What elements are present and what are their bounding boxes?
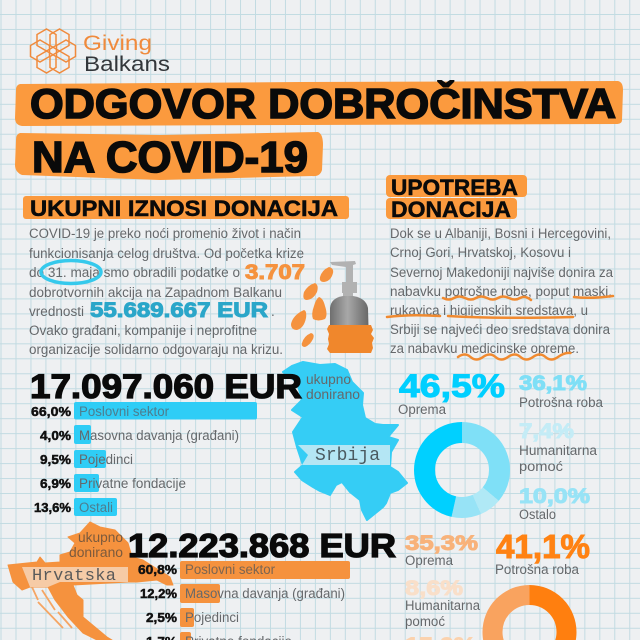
heading bar 1 (386, 175, 527, 197)
total caption Serbia: donirano (306, 387, 360, 402)
usage text: rukavica i higijenskih sredstava, u (390, 303, 588, 318)
intro text (29, 226, 304, 357)
stat: humanitarian aid Croatia: 8,6% (405, 577, 463, 600)
usage text: Dok se u Albaniji, Bosni i Hercegovini, (390, 226, 611, 241)
bar chart Croatia: Poslovni sektor (185, 562, 275, 577)
title (15, 79, 623, 182)
usage text: Crnoj Gori, Hrvatskoj, Kosovu i (390, 245, 571, 260)
stat: 3.707 actions: 3.707 (245, 261, 305, 284)
stat: equipment Croatia (405, 532, 478, 568)
intro text: do 31. maja smo obradili podatke o (29, 265, 240, 280)
bar chart Croatia: Pojedinci (185, 610, 239, 625)
bar chart Serbia: 6,9% (40, 476, 71, 491)
drops (291, 267, 333, 347)
bar chart Croatia: 60,8% (138, 562, 177, 577)
total amount Croatia: 12.223.868 EUR (128, 527, 396, 564)
heading bar 2 (386, 198, 517, 219)
stat: equipment Croatia: Oprema (405, 553, 453, 568)
stat: humanitarian aid Serbia (519, 420, 597, 474)
heading bar (23, 196, 349, 219)
bar chart Serbia: 9,5% (40, 452, 71, 467)
panel: Serbia use of donations (398, 368, 603, 522)
total caption Serbia (306, 372, 360, 402)
heading line 1: UPOTREBA (391, 175, 518, 200)
logo: Giving Balkans (30, 29, 170, 76)
total caption Serbia: ukupno (306, 372, 351, 387)
pump (330, 261, 357, 298)
intro text: organizacije solidarno odgovaraju na krizu. (29, 342, 283, 357)
bar chart Serbia: 13,6% (34, 500, 71, 515)
title line 1: ODGOVOR DOBROČINSTVA (30, 79, 616, 127)
bar chart Serbia: Poslovni sektor (79, 404, 169, 419)
title highlight bar 2 (15, 132, 323, 180)
total amount Serbia: 17.097.060 EUR (30, 368, 302, 406)
stat: equipment Serbia (398, 368, 505, 417)
bottle body (330, 296, 369, 352)
intro text: funkcionisanja celog društva. Od početka krize (29, 246, 304, 261)
stat: consumer goods Croatia: 41,1% (496, 528, 590, 565)
bar chart Serbia: Ostali (79, 500, 113, 515)
donut chart Croatia (492, 595, 566, 640)
stat: total amount: 55.689.667 EUR (90, 299, 268, 322)
map label: Hrvatska: Hrvatska (32, 567, 116, 586)
bar chart Croatia: Masovna davanja (građani) (185, 586, 345, 601)
intro text: vrednosti (29, 304, 84, 319)
usage text: za nabavku medicinske opreme. (390, 341, 579, 356)
bar chart Serbia (31, 402, 257, 516)
stat: equipment Serbia: 46,5% (399, 368, 505, 404)
stat: consumer goods Serbia (519, 372, 603, 410)
map label band: Serbia (298, 445, 390, 465)
intro text: COVID-19 je preko noći promenio život i način (29, 226, 301, 241)
bar chart Croatia: 12,2% (140, 586, 177, 601)
intro text: Ovako građani, kompanije i neprofitne (29, 323, 257, 338)
bar chart Croatia (138, 561, 350, 640)
panel: Croatia use of donations (405, 528, 590, 640)
intro text: . (271, 304, 275, 319)
usage text: Severnoj Makedoniji najviše donira za (390, 265, 613, 280)
stat: consumer goods Serbia: Potrošna roba (519, 395, 603, 410)
heading line 2: DONACIJA (391, 197, 511, 222)
bar chart Serbia: Pojedinci (79, 452, 133, 467)
icon: hexagon flower (30, 29, 76, 73)
logo word: Giving: Giving (83, 32, 152, 55)
title line 2: NA COVID-19 (32, 133, 308, 182)
bar chart Serbia: 66,0% (31, 404, 71, 419)
stat: humanitarian aid Croatia: Humanitarna (405, 598, 480, 613)
stat: equipment Croatia: 35,3% (405, 532, 478, 555)
panel: Serbia donors (30, 368, 360, 516)
usage text (390, 226, 613, 356)
stat: other Serbia: 10,0% (519, 485, 590, 508)
wavy underlines (387, 296, 613, 360)
panel: use of donations (386, 175, 613, 360)
panel: Croatia donors (69, 527, 396, 640)
panel: total donations intro (23, 196, 349, 357)
total caption Croatia: donirano (69, 545, 123, 560)
hand-drawn circle around date (41, 260, 101, 284)
logo word: Balkans: Balkans (84, 53, 170, 76)
stat: humanitarian aid Croatia (405, 577, 480, 629)
map: Croatia (8, 522, 173, 640)
icon: sanitizer bottle with drops (291, 261, 374, 353)
total caption Croatia: ukupno (78, 530, 123, 545)
stat: equipment Serbia: Oprema (398, 402, 446, 417)
stat: humanitarian aid Serbia: pomoć (519, 459, 563, 474)
stat: consumer goods Croatia: Potrošna roba (495, 562, 579, 577)
stat: humanitarian aid Serbia: Humanitarna (519, 443, 597, 458)
usage text: nabavku potrošne robe, poput maski, (390, 284, 612, 299)
stat: humanitarian aid Croatia: pomoć (405, 614, 445, 629)
usage text: Srbiji se najveći deo sredstava donira (390, 322, 610, 337)
stat: consumer goods Serbia: 36,1% (519, 372, 587, 395)
title highlight bar 1 (15, 81, 623, 126)
total caption Croatia (69, 530, 123, 560)
donut chart Serbia (424, 432, 500, 508)
bar chart Serbia: 4,0% (40, 428, 71, 443)
map label: Srbija: Srbija (315, 446, 380, 466)
stat: other Serbia: Ostalo (519, 507, 556, 522)
orange liquid (327, 325, 374, 353)
map label band: Croatia (22, 567, 128, 587)
bar chart Serbia: Privatne fondacije (79, 476, 186, 491)
intro text: dobrotvornih akcija na Zapadnom Balkanu (29, 285, 282, 300)
stat: humanitarian aid Serbia: 7,4% (519, 420, 574, 443)
heading: UKUPNI IZNOSI DONACIJA (30, 196, 338, 221)
map: Serbia (283, 362, 407, 520)
bar chart Croatia: 2,5% (146, 610, 177, 625)
stat: other Serbia (519, 485, 590, 522)
bar chart Serbia: Masovna davanja (građani) (79, 428, 239, 443)
